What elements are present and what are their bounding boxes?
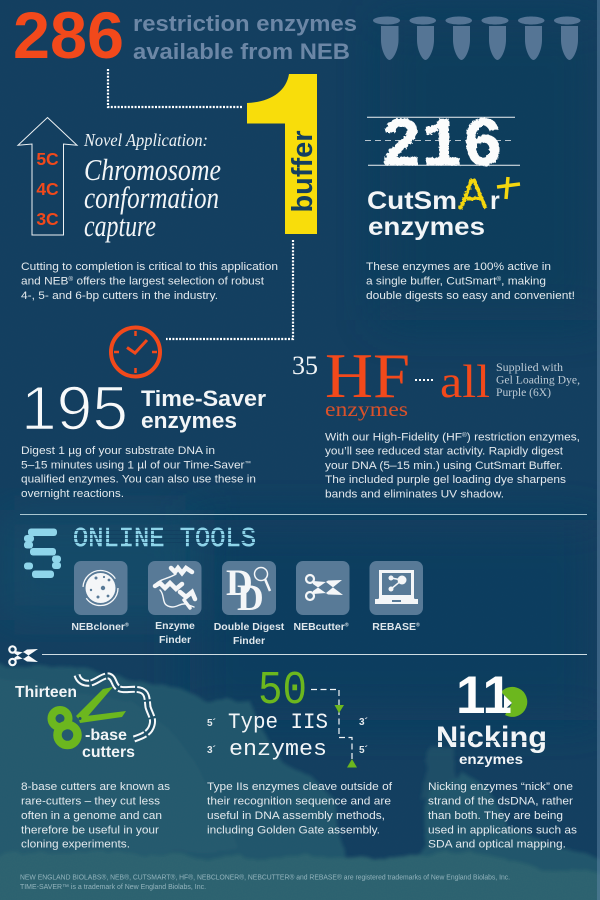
11 Nicking enzymes graphic: Nicking [436, 721, 547, 754]
text: Time-Saver description: Digest 1 µg of your substrate DNA in [21, 445, 215, 457]
50 Type IIS enzymes graphic: 5´ [207, 718, 216, 729]
tool: NEBcloner: ® [125, 622, 129, 628]
heading: novel application: capture [84, 208, 156, 243]
50 Type IIS enzymes graphic: Type IIS [228, 710, 328, 735]
heading: novel application: conformation [84, 180, 219, 215]
text: Time-Saver description [21, 445, 256, 500]
text: CutSmart description: ® [496, 276, 502, 283]
tool: Double Digest Finder: D [226, 563, 253, 604]
50 Type IIS enzymes graphic: 5´ [359, 745, 368, 756]
text: HF description: bands and eliminates UV shadow. [325, 488, 504, 500]
text: Nicking description: than both. They are being [428, 810, 563, 822]
heading: 195 Time-Saver enzymes: 195 [21, 374, 128, 444]
footer: trademark notice: NEW ENGLAND BIOLABS®, NEB®, CUTSMART®, HF®, NEBCLONER®, NEBCUTTER® and REBASE® are registered trademarks of New England Biolabs, Inc. [20, 874, 510, 882]
text: Time-Saver description: overnight reactions. [21, 488, 124, 500]
heading: 35 HF enzymes all: HF [325, 340, 410, 411]
text: HF description: your DNA (5–15 min.) using CutSmart Buffer. [325, 460, 563, 472]
heading: 35 HF enzymes all: enzymes [325, 397, 408, 421]
50 Type IIS enzymes graphic: 3´ [359, 717, 368, 728]
text: HF description: ® [462, 432, 467, 439]
text: supplied with gel loading dye [496, 362, 580, 399]
yellow 1 buffer: buffer [287, 130, 319, 212]
text: HF description: ) restriction enzymes, [467, 432, 580, 444]
text: chromosome capture description: and NEB [21, 276, 65, 288]
text: Type IIS description: their recognition sequence and are [207, 796, 391, 808]
text: Type IIS description: including Golden Gate assembly. [207, 824, 380, 836]
thirteen 8-base cutters graphic: -base [85, 727, 127, 744]
11 Nicking enzymes graphic: 11 [456, 666, 512, 725]
text: 8-base cutters description: often in a genome and can [21, 810, 162, 822]
text: supplied with gel loading dye: Purple (6X) [496, 387, 551, 399]
tool: NEBcutter: ® [345, 622, 349, 628]
headline: 286 restriction enzymes [13, 0, 357, 72]
50 Type IIS enzymes graphic [207, 665, 368, 768]
heading: 35 HF enzymes all [292, 340, 490, 421]
heading: 195 Time-Saver enzymes: Time-Saver [141, 386, 266, 411]
tool: Enzyme Finder: Finder [159, 634, 191, 646]
text: Nicking description: Nicking enzymes “nick” one [428, 781, 573, 793]
text: Nicking description: strand of the dsDNA, rather [428, 796, 573, 808]
icon: six microcentrifuge tubes [373, 16, 580, 60]
icon: clock [111, 328, 160, 376]
text: Type IIS description: useful in DNA assembly methods, [207, 810, 385, 822]
tool: REBASE: ® [416, 622, 420, 628]
heading: novel application: Novel Application: [83, 130, 208, 150]
11 Nicking enzymes graphic [436, 666, 547, 767]
heading: novel application [83, 130, 221, 243]
thirteen 8-base cutters graphic: Thirteen [15, 684, 77, 701]
text: chromosome capture description: offers the largest selection of robust [73, 276, 264, 288]
50 Type IIS enzymes graphic: 3´ [207, 745, 216, 756]
heading: 35 HF enzymes all: 35 [292, 351, 318, 380]
text: HF description: The included purple gel loading dye sharpens [325, 474, 567, 486]
text: Nicking description: used in applications such as [428, 824, 578, 836]
text: 8-base cutters description: therefore be useful in your [21, 824, 159, 836]
thirteen 8-base cutters graphic [15, 675, 153, 761]
text: Type IIS description [207, 781, 393, 836]
icon: 3C 4C 5C arrow: 4C [36, 179, 59, 199]
headline: 286 restriction enzymes: available from NEB [133, 39, 350, 64]
tool: REBASE [370, 561, 423, 633]
dotted connector: buffer to clock [166, 240, 293, 339]
footer: trademark notice [20, 874, 510, 891]
11 Nicking enzymes graphic: enzymes [459, 751, 523, 767]
heading: online tools: ONLINE TOOLS [73, 525, 256, 555]
50 Type IIS enzymes graphic: 50 [258, 665, 307, 718]
tool: REBASE: REBASE [372, 621, 416, 633]
216 chalkboard number: 216 [381, 108, 503, 187]
text: CutSmart description: double digests so easy and convenient! [366, 290, 575, 302]
heading: CutSmart enzymes: r [490, 187, 500, 215]
text: chromosome capture description: Cutting to completion is critical to this application [21, 261, 278, 273]
dotted connector: 286 to 1 buffer [108, 69, 243, 107]
text: chromosome capture description: ® [68, 276, 74, 283]
tool: Double Digest Finder: Finder [233, 635, 265, 647]
footer: trademark notice: TIME-SAVER™ is a trademark of New England Biolabs, Inc. [20, 884, 206, 891]
heading: 35 HF enzymes all: all [440, 356, 490, 408]
icon: scissors divider [9, 646, 38, 665]
text: HF description [325, 432, 580, 500]
icon: pixel number 5 [24, 528, 61, 578]
text: Nicking description: SDA and optical mapping. [428, 839, 566, 851]
text: supplied with gel loading dye: Supplied with [496, 362, 563, 374]
50 Type IIS enzymes graphic: enzymes [229, 737, 327, 762]
heading: 195 Time-Saver enzymes [21, 374, 266, 444]
heading: CutSmart enzymes: enzymes [368, 213, 485, 241]
text: Time-Saver description: 5–15 minutes using 1 µl of our Time-Saver [21, 460, 228, 472]
icon: 3C 4C 5C arrow: 5C [36, 149, 59, 169]
text: HF description: With our High-Fidelity (HF [325, 432, 452, 444]
heading: 195 Time-Saver enzymes: enzymes [141, 408, 237, 433]
headline: 286 restriction enzymes: 286 [13, 0, 124, 72]
tool: NEBcloner: NEBcloner [71, 621, 125, 633]
tool: Double Digest Finder: D [237, 578, 264, 619]
icon: 3C 4C 5C arrow [18, 118, 77, 235]
heading: CutSmart enzymes [367, 170, 520, 241]
text: chromosome capture description: 4-, 5- and 6-bp cutters in the industry. [21, 290, 218, 302]
text: 8-base cutters description [21, 781, 171, 851]
tool: NEBcloner [71, 561, 129, 633]
text: 8-base cutters description: 8-base cutters are known as [21, 781, 171, 793]
tool: NEBcutter: NEBcutter [293, 621, 345, 633]
tool: NEBcutter [293, 561, 350, 633]
text: supplied with gel loading dye: Gel Loading Dye, [496, 374, 580, 386]
heading: novel application: Chromosome [84, 152, 221, 187]
icon: 3C 4C 5C arrow: 3C [36, 209, 59, 229]
text: CutSmart description [366, 261, 575, 302]
text: Time-Saver description: qualified enzymes. You can also use these in [21, 474, 256, 486]
text: CutSmart description: These enzymes are 100% active in [366, 261, 551, 273]
text: 8-base cutters description: rare-cutters – they cut less [21, 796, 161, 808]
text: Type IIS description: Type IIs enzymes cleave outside of [207, 781, 393, 793]
text: CutSmart description: a single buffer, CutSmart [366, 276, 487, 288]
yellow 1 buffer [247, 74, 319, 234]
text: CutSmart description: , making [501, 276, 546, 288]
heading: CutSmart enzymes: CutSm [367, 187, 457, 215]
text: Time-Saver description: ™ [245, 460, 251, 467]
text: HF description: you’ll see reduced star activity. Rapidly digest [325, 446, 563, 458]
text: chromosome capture description [21, 261, 278, 302]
tool: Enzyme Finder: Enzyme [155, 620, 195, 632]
text: 8-base cutters description: cloning experiments. [21, 839, 130, 851]
text: Nicking description [428, 781, 578, 851]
thirteen 8-base cutters graphic: cutters [82, 744, 135, 761]
headline: 286 restriction enzymes: restriction enzymes [133, 11, 357, 36]
tool: Double Digest Finder [214, 561, 285, 647]
tool: Double Digest Finder: Double Digest [214, 621, 285, 633]
tool: Enzyme Finder [148, 561, 202, 646]
heading: CutSmart enzymes: A [458, 170, 489, 219]
